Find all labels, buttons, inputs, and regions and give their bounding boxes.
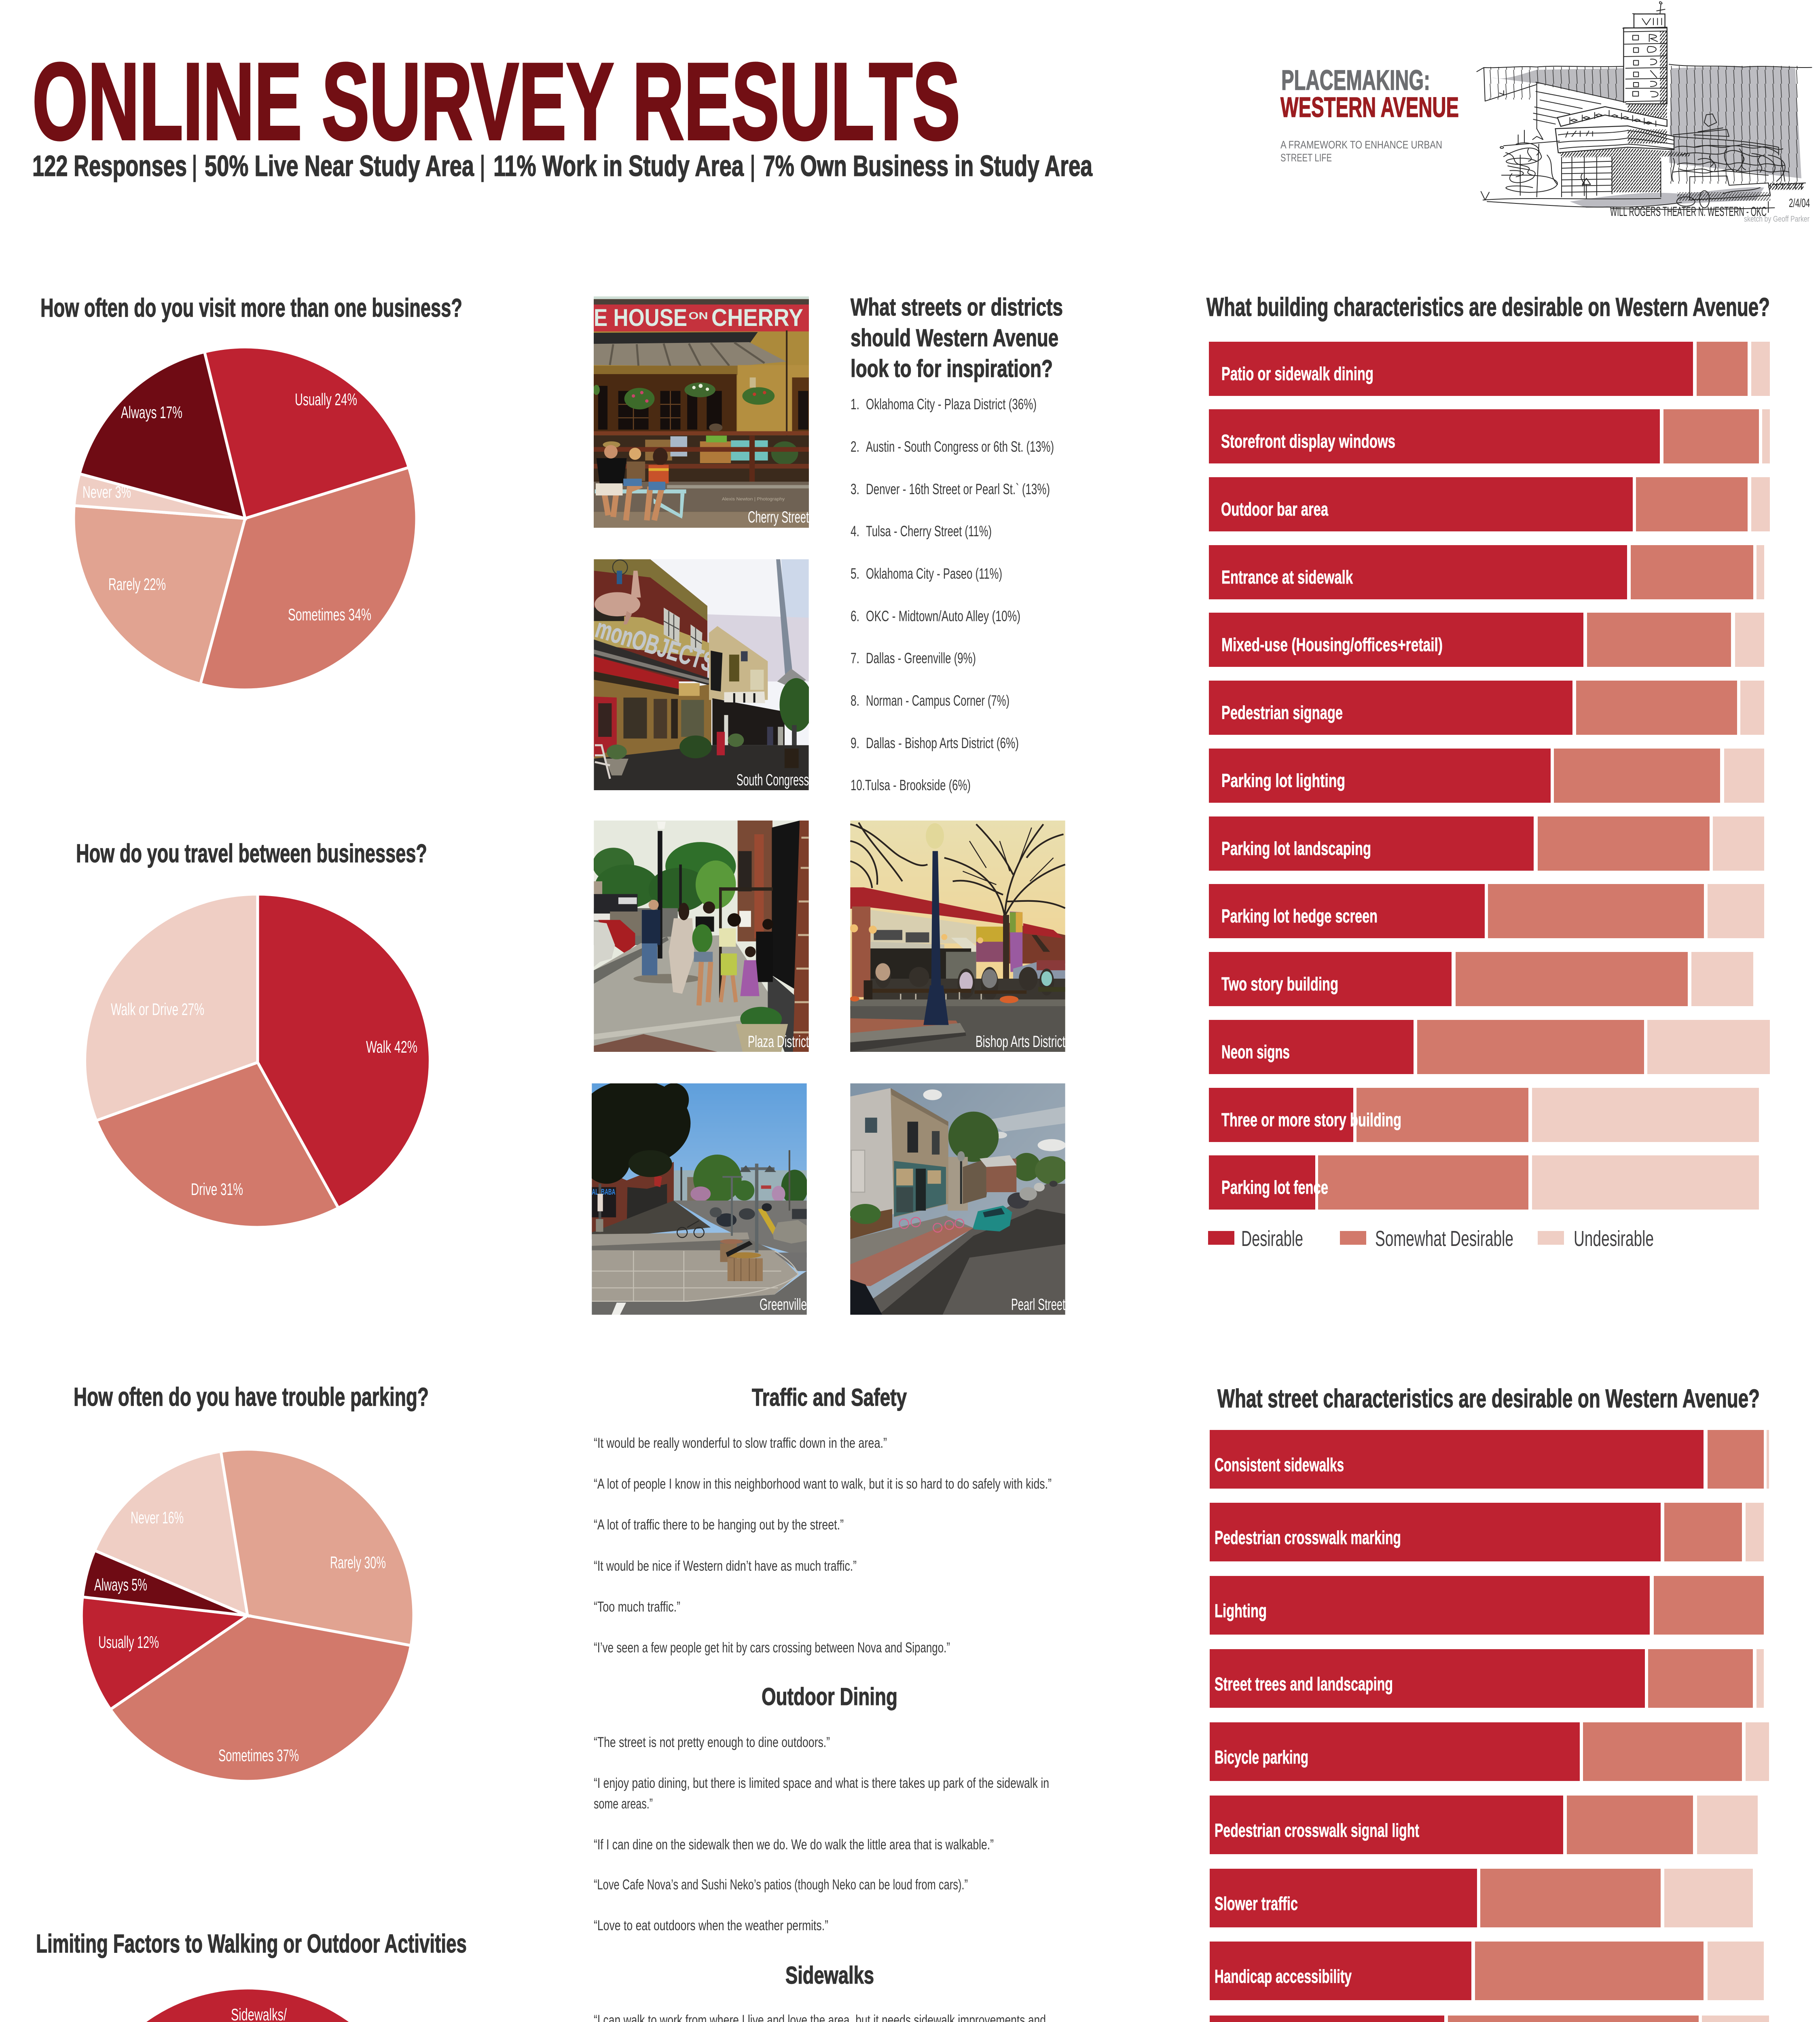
quotes: traffic and safety: “A lot of people I know in this neighborhood want to walk, but it is so hard to do safely with kids.” <box>594 1476 1052 1492</box>
legend <box>1208 1227 1654 1251</box>
ranked list of inspiration streets: 5. <box>851 565 859 582</box>
project tagline <box>1280 139 1442 164</box>
photo: Cherry Street <box>593 296 809 528</box>
stacked bar: Two story building: Two story building <box>1221 973 1338 994</box>
ranked list of inspiration streets <box>851 396 1054 793</box>
heading: How do you travel between businesses? <box>76 839 427 868</box>
pie labels <box>83 390 371 624</box>
quotes: outdoor dining: “Love to eat outdoors when the weather permits.” <box>594 1918 828 1933</box>
heading: How often do you visit more than one business? <box>40 293 462 322</box>
panel: parking trouble pie <box>74 1382 429 1781</box>
pie labels: Usually 24% <box>295 390 357 409</box>
subtitle: survey response statistics: | <box>749 150 756 182</box>
quotes: traffic and safety: “I’ve seen a few people get hit by cars crossing between Nova and Sipango.” <box>594 1640 950 1656</box>
photo: Plaza District <box>593 821 809 1052</box>
stacked bar: Outdoor bar area <box>1209 477 1770 531</box>
caption: Plaza District <box>748 1033 809 1051</box>
ranked list of inspiration streets: 4. <box>851 523 859 539</box>
heading: look to for inspiration? <box>851 355 1053 382</box>
caption: Cherry Street <box>748 508 809 526</box>
pie labels: Never 3% <box>83 482 131 501</box>
quotes: outdoor dining <box>594 1734 1049 1933</box>
subtitle: survey response statistics: 11% Work in Study Area <box>493 150 744 182</box>
stacked bar: Lighting: Lighting <box>1215 1600 1267 1621</box>
panel: inspiration photos and list <box>576 294 1069 1315</box>
stacked bar: Pedestrian signage: Pedestrian signage <box>1221 702 1343 723</box>
panel: limiting factors pie <box>36 1929 467 2022</box>
pie chart <box>85 894 430 1227</box>
pie chart <box>81 1449 414 1781</box>
panel: travel mode pie <box>76 839 430 1227</box>
photo: Greenville <box>576 1080 808 1315</box>
quotes: traffic and safety: “A lot of traffic there to be hanging out by the street.” <box>594 1517 844 1533</box>
pie labels: Sometimes 37% <box>218 1746 299 1765</box>
legend: Desirable <box>1241 1227 1303 1251</box>
ranked list of inspiration streets: Denver - 16th Street or Pearl St.` (13%) <box>866 481 1050 497</box>
photo: Cherry Street: ON <box>688 311 708 322</box>
stacked bar: Street trees and landscaping: Street trees and landscaping <box>1215 1673 1393 1694</box>
quotes: outdoor dining: “The street is not pretty enough to dine outdoors.” <box>594 1734 830 1750</box>
subtitle: survey response statistics: | <box>191 150 198 182</box>
pie labels: Rarely 22% <box>108 575 166 594</box>
quotes: outdoor dining: “Love Cafe Nova’s and Sushi Neko’s patios (though Neko can be loud from cars).” <box>594 1877 968 1893</box>
ranked list of inspiration streets: Tulsa - Cherry Street (11%) <box>866 523 992 539</box>
ranked list of inspiration streets: 2. <box>851 438 859 455</box>
subtitle: survey response statistics: 122 Responses <box>32 150 187 182</box>
stacked bar: Neon signs <box>1209 1020 1770 1074</box>
stacked bar: Outdoor bar area: Outdoor bar area <box>1221 499 1328 520</box>
ranked list of inspiration streets: Austin - South Congress or 6th St. (13%) <box>866 438 1054 455</box>
heading <box>851 294 1063 382</box>
photo: Greenville: ALI BABA <box>592 1188 615 1197</box>
legend: Somewhat Desirable <box>1375 1227 1513 1251</box>
subtitle: survey response statistics: 7% Own Business in Study Area <box>763 150 1093 182</box>
subtitle: survey response statistics: | <box>479 150 486 182</box>
stacked bar: Neon signs: Neon signs <box>1221 1041 1290 1062</box>
caption: Greenville <box>760 1296 807 1313</box>
project name: PLACEMAKING: <box>1281 64 1430 96</box>
ranked list of inspiration streets: 1. <box>851 396 859 412</box>
ranked list of inspiration streets: OKC - Midtown/Auto Alley (10%) <box>866 608 1020 624</box>
pie labels: Usually 12% <box>98 1633 159 1652</box>
stacked bar: Pedestrian crosswalk marking <box>1210 1503 1764 1561</box>
stacked bar: Handicap accessibility: Handicap accessibility <box>1215 1966 1352 1987</box>
caption: Bishop Arts District <box>976 1033 1065 1051</box>
project title block <box>1280 64 1459 164</box>
panel: street characteristics chart <box>1206 1384 1769 2022</box>
pie chart <box>74 347 417 690</box>
stacked bar: Storefront display windows <box>1209 409 1770 463</box>
stacked bar: Handicap accessibility <box>1210 1942 1764 2000</box>
pie chart <box>73 1988 422 2022</box>
stacked bar: Storefront display windows: Storefront display windows <box>1221 431 1395 452</box>
quotes: outdoor dining: “I enjoy patio dining, but there is limited space and what is there takes up park of the sidewalk in <box>594 1775 1049 1791</box>
stacked bar: Bicycle parking <box>1210 1722 1769 1781</box>
stacked bar: Three or more story building <box>1209 1088 1759 1142</box>
ranked list of inspiration streets: Norman - Campus Corner (7%) <box>866 692 1009 709</box>
stacked bar: Pedestrian crosswalk signal light: Pedestrian crosswalk signal light <box>1215 1820 1419 1841</box>
panel: visit frequency pie <box>40 293 462 690</box>
ranked list of inspiration streets: 10.Tulsa - Brookside (6%) <box>851 777 971 793</box>
ranked list of inspiration streets: 6. <box>851 608 859 624</box>
stacked bar: On-street parking <box>1210 2016 1769 2022</box>
stacked bar: Three or more story building: Three or more story building <box>1221 1109 1401 1130</box>
pie labels: Walk 42% <box>366 1037 417 1056</box>
stacked bar: Mixed-use: Mixed-use (Housing/offices+retail) <box>1221 634 1443 655</box>
subtitle: survey response statistics <box>32 150 1093 182</box>
quotes: outdoor dining: some areas.” <box>594 1796 653 1812</box>
stacked bar: Bicycle parking: Bicycle parking <box>1215 1747 1308 1768</box>
stacked bar: Street trees and landscaping <box>1210 1649 1764 1708</box>
pie labels: Always 17% <box>121 403 182 422</box>
stacked bar: Patio or sidewalk dining <box>1209 342 1770 396</box>
stacked bar: Parking lot fence: Parking lot fence <box>1221 1177 1328 1198</box>
ranked list of inspiration streets: 7. <box>851 650 859 666</box>
caption: South Congress <box>736 771 809 789</box>
pie labels: Rarely 30% <box>330 1553 386 1572</box>
project tagline: STREET LIFE <box>1280 152 1332 164</box>
stacked bar: Lighting <box>1210 1576 1764 1635</box>
stacked bar: Two story building <box>1209 952 1753 1006</box>
pie labels: Walk or Drive 27% <box>111 1000 204 1019</box>
legend: Undesirable <box>1574 1227 1654 1251</box>
ranked list of inspiration streets: 9. <box>851 735 859 751</box>
ranked list of inspiration streets: 3. <box>851 481 859 497</box>
stacked bar: Parking lot hedge screen: Parking lot hedge screen <box>1221 905 1378 926</box>
panel: building characteristics chart <box>1206 292 1770 1251</box>
title: ONLINE SURVEY RESULTS <box>32 41 960 163</box>
caption: Pearl Street <box>1011 1296 1065 1313</box>
heading: should Western Avenue <box>851 324 1058 351</box>
quotes: traffic and safety <box>594 1435 1052 1656</box>
photo: Cherry Street: E HOUSE <box>594 304 687 331</box>
stacked bar: Parking lot lighting <box>1209 749 1764 803</box>
ranked list of inspiration streets: Oklahoma City - Plaza District (36%) <box>866 396 1037 412</box>
stacked bar: Consistent sidewalks: Consistent sidewalks <box>1215 1454 1344 1475</box>
project tagline: A FRAMEWORK TO ENHANCE URBAN <box>1280 139 1442 151</box>
stacked bar: Parking lot landscaping: Parking lot landscaping <box>1221 838 1371 859</box>
stacked bar: Parking lot fence <box>1209 1155 1759 1210</box>
ranked list of inspiration streets: Dallas - Bishop Arts District (6%) <box>866 735 1019 751</box>
photo: South Congress: monOBJECTS <box>592 613 718 678</box>
stacked bar: Entrance at sidewalk: Entrance at sidewalk <box>1221 567 1353 588</box>
ranked list of inspiration streets: Dallas - Greenville (9%) <box>866 650 976 666</box>
quotes: traffic and safety: “Too much traffic.” <box>594 1599 680 1615</box>
photo: Pearl Street <box>850 1083 1069 1315</box>
heading: Sidewalks: Sidewalks <box>785 1962 874 1989</box>
project location: WESTERN AVENUE <box>1280 91 1459 123</box>
quotes: traffic and safety: “It would be nice if Western didn’t have as much traffic.” <box>594 1558 857 1574</box>
heading: Outdoor Dining: Outdoor Dining <box>762 1683 897 1710</box>
pie labels: Sometimes 34% <box>288 605 371 624</box>
stacked bar: Slower traffic: Slower traffic <box>1215 1893 1298 1914</box>
pie labels <box>111 1000 417 1199</box>
stacked bar: Consistent sidewalks <box>1210 1430 1769 1489</box>
stacked bar: Parking lot lighting: Parking lot lighting <box>1221 770 1345 791</box>
quotes: traffic and safety: “It would be really wonderful to slow traffic down in the area.” <box>594 1435 887 1451</box>
stacked bar: Pedestrian crosswalk signal light <box>1210 1796 1758 1854</box>
pie labels: Drive 31% <box>191 1180 243 1199</box>
stacked bar: Slower traffic <box>1210 1869 1753 1927</box>
pie labels <box>94 1508 386 1765</box>
ranked list of inspiration streets: Oklahoma City - Paseo (11%) <box>866 565 1002 582</box>
heading: Limiting Factors to Walking or Outdoor Activities <box>36 1929 467 1958</box>
quotes: outdoor dining: “If I can dine on the sidewalk then we do. We do walk the little area that is walkable.” <box>594 1837 994 1853</box>
photo: South Congress <box>592 559 813 790</box>
stacked bar: Entrance at sidewalk <box>1209 545 1764 599</box>
photo: Bishop Arts District <box>850 821 1065 1052</box>
stacked bar: Mixed-use <box>1209 613 1764 667</box>
sketch: Will Rogers Theater <box>1477 2 1812 224</box>
heading: How often do you have trouble parking? <box>74 1382 429 1411</box>
pie labels: Never 16% <box>131 1508 184 1527</box>
stacked bar: Patio or sidewalk dining: Patio or sidewalk dining <box>1221 363 1373 384</box>
heading: Traffic and Safety: Traffic and Safety <box>752 1384 907 1411</box>
stacked bar: Pedestrian crosswalk marking: Pedestrian crosswalk marking <box>1215 1527 1401 1548</box>
pie labels: Always 5% <box>94 1575 147 1594</box>
photo: Cherry Street: Alexis Newton | Photography <box>722 497 785 502</box>
panel: survey quotes <box>594 1384 1062 2022</box>
heading: What streets or districts <box>851 294 1063 321</box>
stacked bar: Pedestrian signage <box>1209 681 1764 735</box>
stacked bar: Parking lot hedge screen <box>1209 884 1764 938</box>
stacked bar: Parking lot landscaping <box>1209 816 1764 871</box>
ranked list of inspiration streets: 8. <box>851 692 859 709</box>
subtitle: survey response statistics: 50% Live Near Study Area <box>205 150 474 182</box>
